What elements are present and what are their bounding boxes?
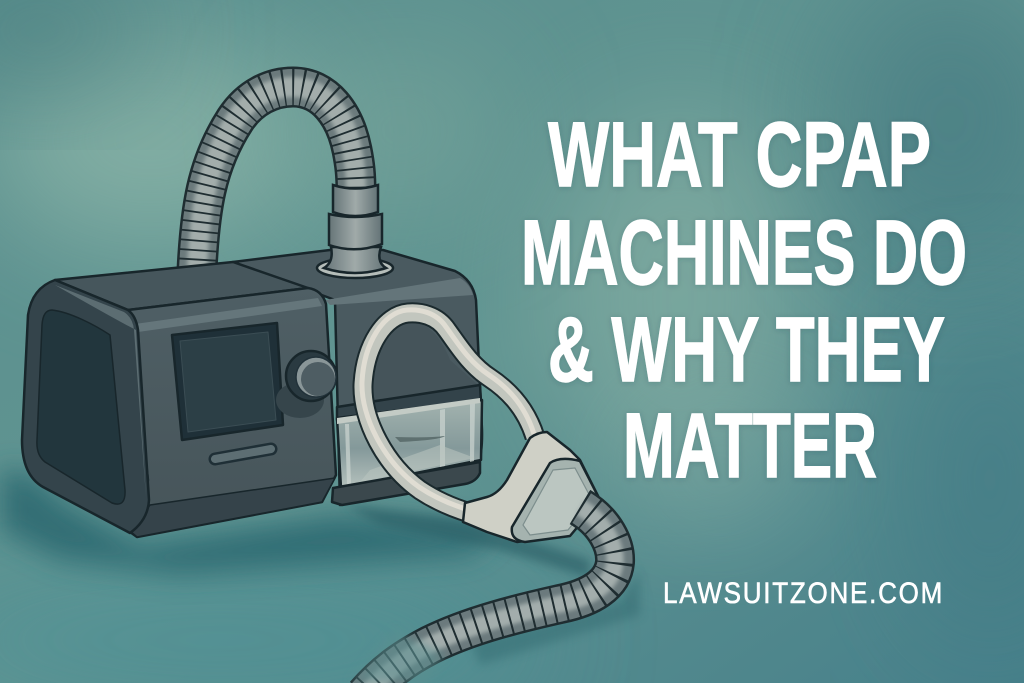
mask frame — [463, 432, 600, 542]
knob — [286, 351, 336, 401]
right housing — [233, 250, 482, 505]
lid — [55, 262, 308, 310]
tank top strip — [337, 398, 480, 424]
front bottom lip — [130, 478, 335, 537]
tank water surface — [360, 445, 475, 482]
upper corrugated hose — [197, 87, 356, 270]
front face — [128, 288, 336, 537]
knob face — [301, 362, 335, 396]
website credit: LAWSUITZONE.COM — [663, 577, 944, 610]
title — [521, 104, 967, 497]
machine body — [22, 250, 482, 537]
dark recess inside tube loop — [372, 322, 478, 403]
tank vertical glints — [345, 402, 475, 485]
tank water line — [395, 436, 445, 442]
front slot button — [215, 449, 271, 459]
connector base ring — [317, 258, 393, 278]
knob shadow — [276, 382, 324, 418]
hose end fade — [350, 630, 445, 683]
nasal mask — [463, 432, 600, 542]
highlight strip on right housing — [325, 278, 473, 305]
knob ring — [296, 357, 336, 397]
screen — [180, 332, 276, 432]
tank base — [332, 462, 480, 505]
floor shadows — [0, 469, 640, 665]
front top highlight — [135, 298, 322, 332]
connector upper cylinder — [333, 185, 378, 216]
connector lower cylinder — [329, 214, 382, 249]
lower corrugated hose — [350, 507, 615, 683]
connector flare — [324, 247, 386, 273]
tank lid band — [337, 385, 481, 420]
bezel highlight — [55, 285, 146, 498]
screen bezel — [172, 323, 283, 440]
hose connector — [317, 185, 393, 278]
title: MATTER — [623, 395, 877, 497]
left dark panel — [37, 310, 125, 504]
mask tube loop — [362, 310, 535, 513]
mask clear dome — [523, 468, 592, 535]
mask cushion — [512, 459, 600, 542]
left bezel — [22, 280, 149, 533]
water tank — [337, 400, 482, 488]
